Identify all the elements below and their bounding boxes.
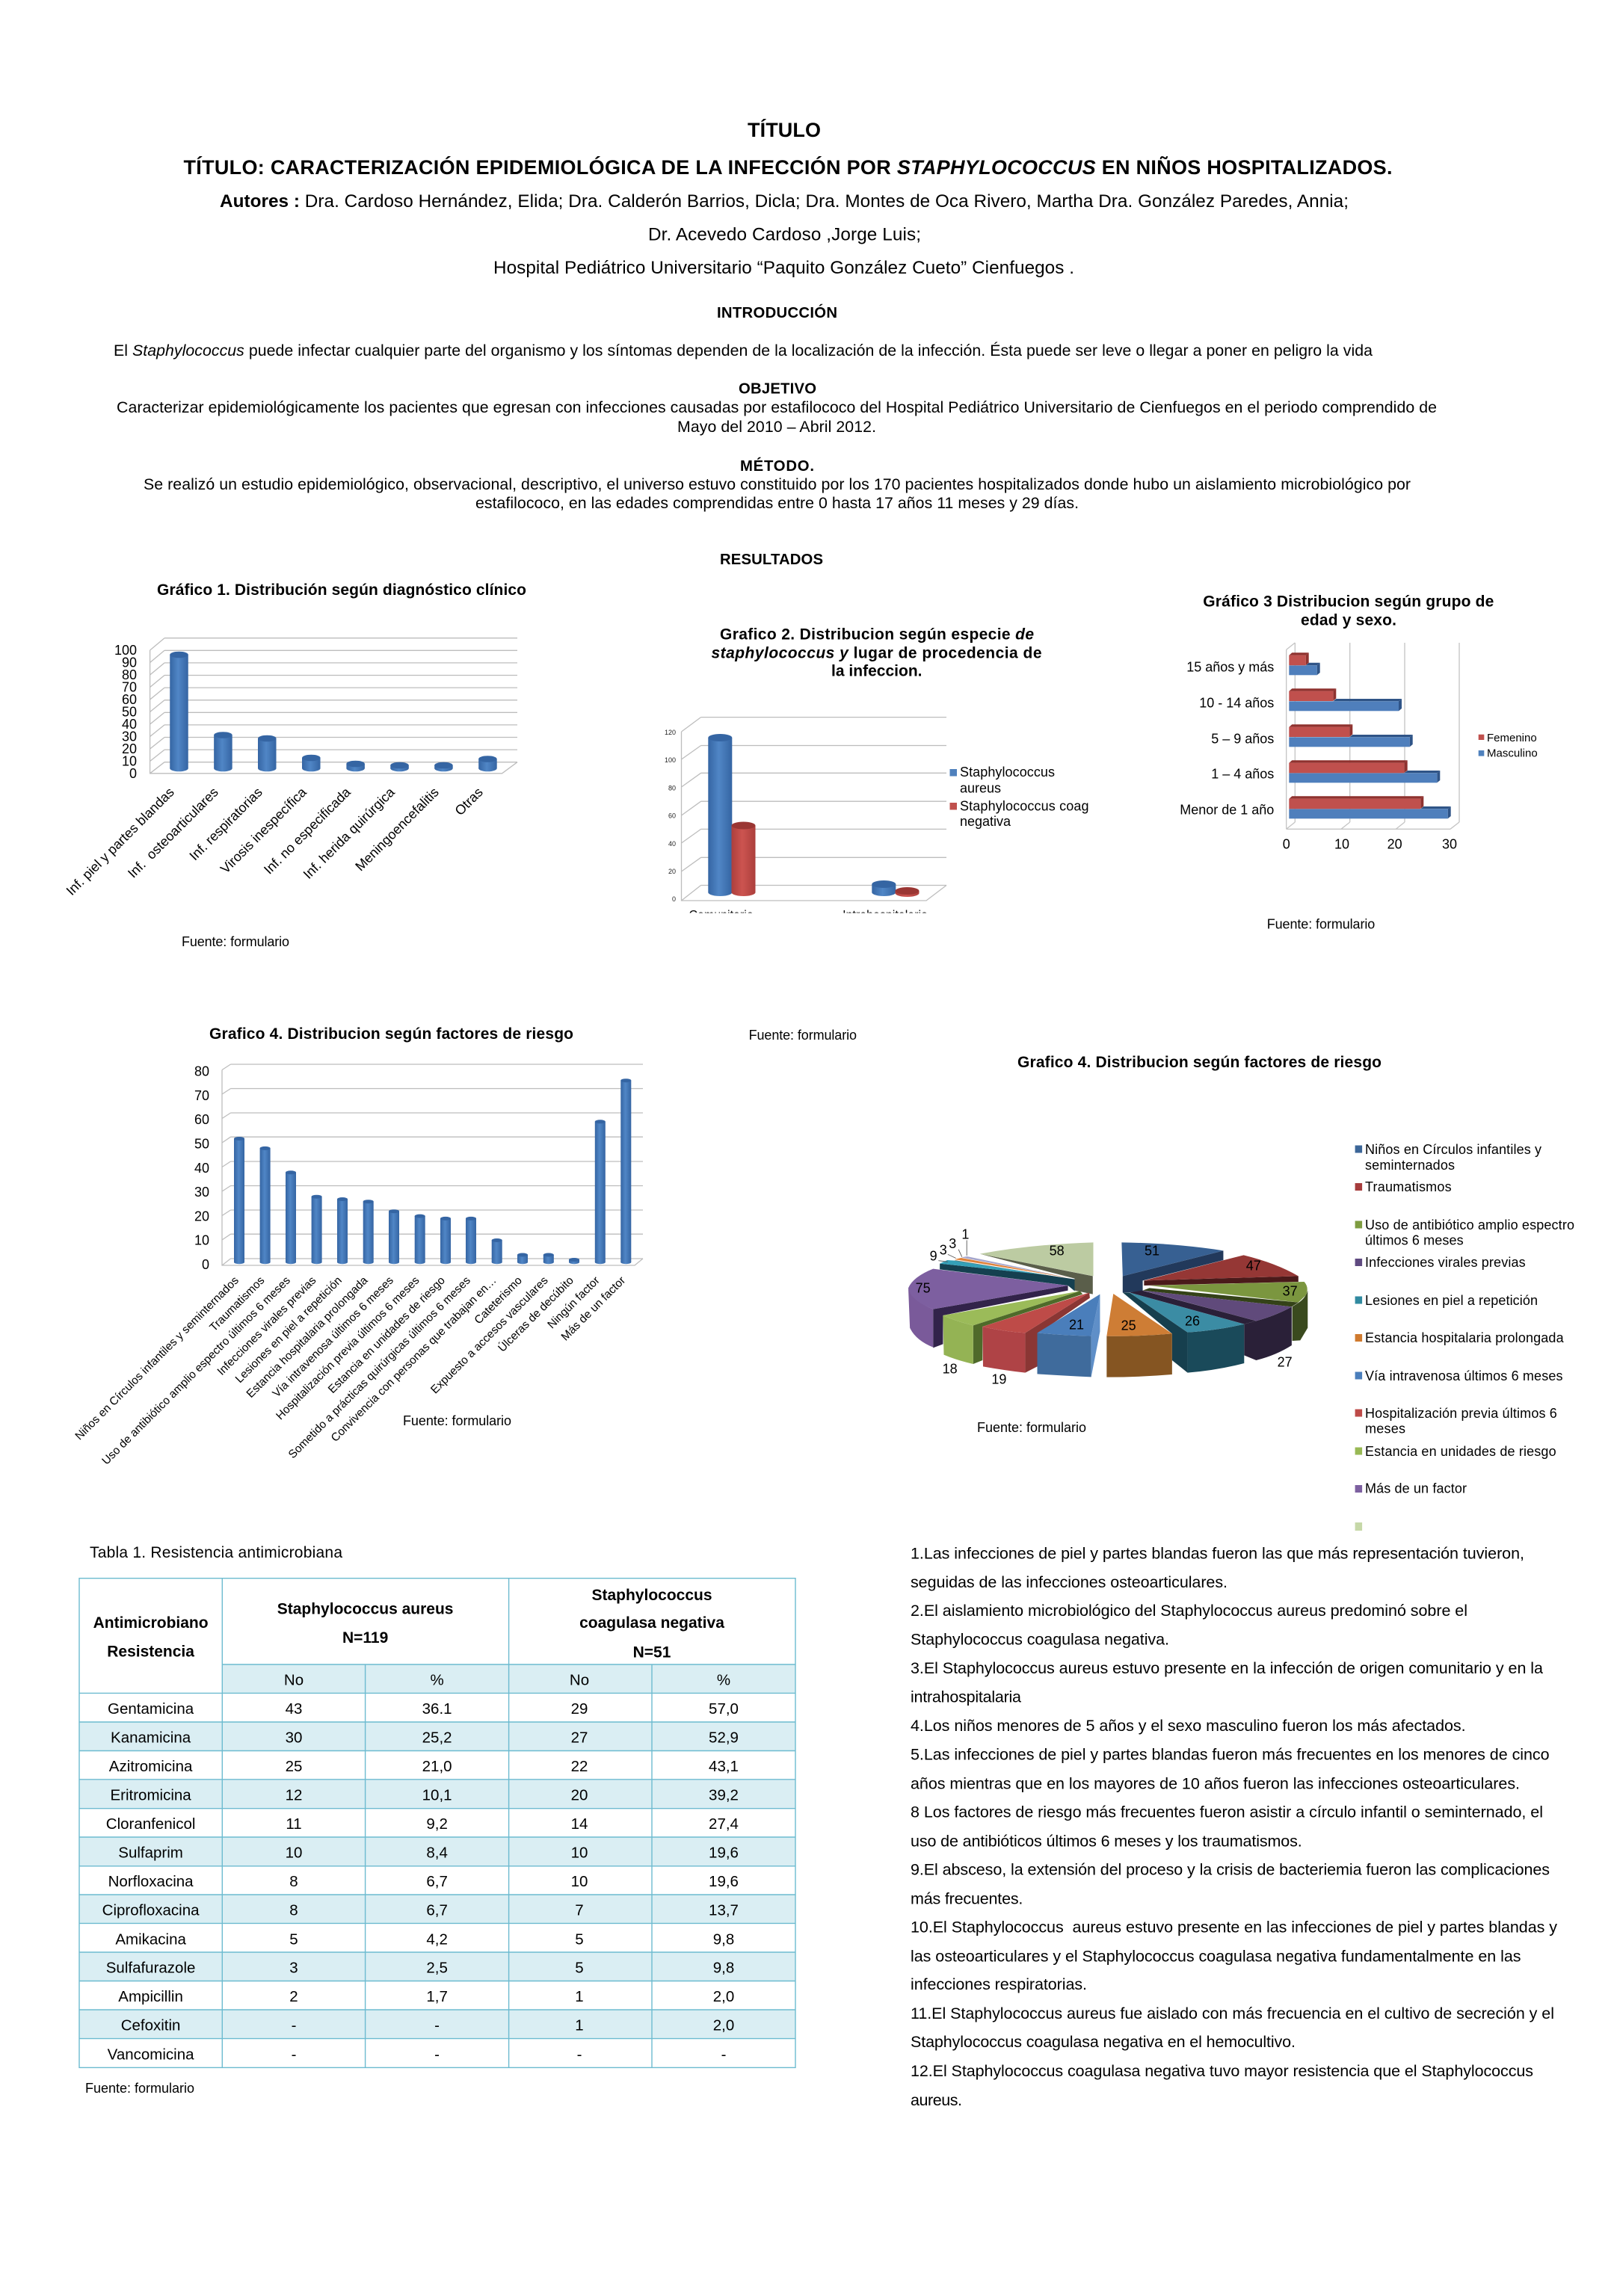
grafico 2 title: la infeccion. <box>831 662 922 680</box>
conclusions text block: aureus. <box>911 2091 962 2109</box>
table data rows: 8,4 <box>426 1845 448 1861</box>
grafico 3 category labels <box>1180 659 1274 817</box>
table header: Staphylococcus <box>591 1587 712 1604</box>
table data rows: Azitromicina <box>109 1758 193 1775</box>
conclusions text block: 2.El aislamiento microbiológico del Staphylococcus aureus predominó sobre el <box>911 1602 1467 1620</box>
conclusions text block: las osteoarticulares y el Staphylococcus coagulasa negativa fundamentalmente en las <box>911 1948 1521 1966</box>
grafico 1 y axis <box>114 643 137 781</box>
table data rows <box>102 1700 739 2063</box>
table sub header: No <box>570 1671 589 1689</box>
pie legend: Hospitalización previa últimos 6 <box>1365 1406 1557 1421</box>
grafico 4 y axis: 80 <box>194 1064 209 1079</box>
grafico 2 y axis: 120 <box>665 729 676 736</box>
grafico 4 y axis: 50 <box>194 1136 209 1151</box>
grafico 3 title <box>1203 593 1494 629</box>
objetivo: Caracterizar epidemiológicamente los pacientes que egresan con infecciones causadas por estafilococo del Hospital Pediátrico Universitario de Cienfuegos en el periodo comprendido de <box>117 398 1437 416</box>
table data rows: Ampicillin <box>118 1988 183 2005</box>
table data rows: 22 <box>571 1758 588 1775</box>
table data rows: 2,0 <box>713 2016 734 2034</box>
table data rows: 10 <box>571 1845 588 1861</box>
grafico 2 clipped category labels: Intrahospitalario <box>843 909 928 922</box>
table data rows: 7 <box>575 1901 584 1919</box>
table: resistencia antimicrobiana <box>79 1578 795 2067</box>
pie value labels: 75 <box>916 1280 931 1295</box>
pie value labels: 37 <box>1283 1283 1298 1298</box>
grafico 2 legend: Staphylococcus <box>960 765 1055 780</box>
table data rows: - <box>292 2016 296 2034</box>
conclusions text block <box>911 1545 1557 2109</box>
table grid <box>79 1578 795 2067</box>
grafico 2 plot frame <box>682 718 946 901</box>
table data rows: 14 <box>571 1815 588 1833</box>
grafico 2 y axis: 80 <box>668 785 676 792</box>
grafico 2 y axis: 40 <box>668 840 676 848</box>
table data rows: Gentamicina <box>108 1700 194 1718</box>
table source: Fuente: formulario <box>85 2081 194 2096</box>
grafico 2 legend: aureus <box>960 780 1001 795</box>
conclusions text block: 1.Las infecciones de piel y partes blandas fueron las que más representación tuvieron, <box>911 1545 1524 1563</box>
pie value labels: 3 <box>940 1242 947 1257</box>
grafico 2 legend <box>949 765 1088 829</box>
panel: grafico 3 <box>1180 593 1538 931</box>
table data rows: Ciprofloxacina <box>102 1901 200 1919</box>
table header: N=51 <box>633 1644 671 1661</box>
pie value labels: 25 <box>1121 1318 1136 1333</box>
grafico 4 category labels: Convivencia con personas que trabajan en… <box>329 1274 499 1445</box>
pie legend: Lesiones en piel a repetición <box>1365 1293 1538 1308</box>
grafico 3 category labels: 1 – 4 años <box>1211 766 1274 781</box>
grafico 3 category labels: Menor de 1 año <box>1180 802 1274 817</box>
conclusions text block: 12.El Staphylococcus coagulasa negativa tuvo mayor resistencia que el Staphylococcus <box>911 2062 1533 2080</box>
conclusions text block: seguidas de las infecciones osteoarticulares. <box>911 1573 1228 1591</box>
table data rows: 13,7 <box>709 1901 739 1919</box>
grafico 1 source: Fuente: formulario <box>182 934 289 949</box>
metodo: estafilococo, en las edades comprendidas entre 0 hasta 17 años 11 meses y 29 días. <box>475 494 1079 512</box>
pie legend: Estancia en unidades de riesgo <box>1365 1444 1556 1459</box>
conclusions text block: 5.Las infecciones de piel y partes blandas fueron más frecuentes en los menores de cinco <box>911 1746 1550 1764</box>
table data rows: 43 <box>286 1700 302 1718</box>
table data rows: Amikacina <box>115 1931 186 1948</box>
conclusions text block: intrahospitalaria <box>911 1688 1021 1706</box>
table data rows: 8 <box>289 1873 298 1890</box>
panel: grafico 4 bar chart <box>73 1025 643 1467</box>
table data rows: - <box>292 2046 296 2063</box>
table data rows: 4,2 <box>426 1931 448 1948</box>
table data rows: - <box>434 2016 440 2034</box>
conclusions text block: años mientras que en los mayores de 10 años fueron las infecciones osteoarticulares. <box>911 1774 1520 1792</box>
pie value labels: 58 <box>1050 1243 1065 1258</box>
table data rows: 2,0 <box>713 1988 734 2005</box>
table header: coagulasa negativa <box>579 1614 724 1632</box>
grafico 3 title: Gráfico 3 Distribucion según grupo de <box>1203 593 1494 611</box>
grafico 1 plot frame <box>150 638 517 774</box>
grafico 3 category labels: 5 – 9 años <box>1211 731 1274 746</box>
table data rows: 57,0 <box>709 1700 739 1718</box>
grafico 4 y axis: 30 <box>194 1185 209 1200</box>
grafico 2 legend: Staphylococcus coag <box>960 798 1088 813</box>
pie value labels: 9 <box>930 1249 937 1264</box>
table data rows: 27 <box>571 1729 588 1746</box>
grafico 1 bars <box>170 652 497 771</box>
grafico 4 y axis: 20 <box>194 1209 209 1224</box>
metodo: Se realizó un estudio epidemiológico, observacional, descriptivo, el universo estuvo constituido por los 170 pacientes hospitalizados donde hubo un aislamiento microbiológico por <box>144 475 1411 493</box>
grafico 3 category labels: 10 - 14 años <box>1199 695 1274 710</box>
conclusions text block: 8 Los factores de riesgo más frecuentes fueron asistir a círculo infantil o seminternado, el <box>911 1803 1543 1821</box>
table data rows: 25,2 <box>422 1729 452 1746</box>
objetivo <box>117 381 1437 436</box>
table data rows: 20 <box>571 1786 588 1804</box>
grafico 4 bar source: Fuente: formulario <box>403 1413 511 1428</box>
grafico 4 category labels: Lesiones en piel a repetición <box>233 1274 345 1386</box>
table sub header: % <box>430 1671 444 1689</box>
pie legend: últimos 6 meses <box>1365 1233 1464 1248</box>
grafico 2 title <box>712 626 1042 680</box>
metodo: MÉTODO. <box>740 457 814 475</box>
title block <box>184 118 1392 179</box>
table data rows: 12 <box>286 1786 302 1804</box>
table header: Antimicrobiano <box>93 1614 209 1632</box>
grafico 4 category labels: Hospitalización previa últimos 6 meses <box>274 1274 422 1422</box>
grafico 1 y axis: 60 <box>122 692 137 707</box>
conclusions text block: 10.El Staphylococcus aureus estuvo presente en las infecciones de piel y partes blandas y <box>911 1919 1557 1937</box>
table data rows: 8 <box>289 1901 298 1919</box>
grafico 3 x axis <box>1283 836 1457 851</box>
pie legend: Uso de antibiótico amplio espectro <box>1365 1218 1574 1232</box>
pie value labels: 27 <box>1278 1355 1293 1370</box>
conclusions text block: Staphylococcus coagulasa negativa. <box>911 1631 1169 1649</box>
conclusions text block: más frecuentes. <box>911 1889 1023 1907</box>
table data rows: 1,7 <box>426 1988 448 2005</box>
grafico 4 category labels: Infecciones virales previas <box>215 1274 319 1378</box>
table data rows: 27,4 <box>709 1815 739 1833</box>
pie value labels: 26 <box>1185 1313 1200 1328</box>
grafico 4 y axis: 10 <box>194 1233 209 1248</box>
grafico 2 title: staphylococcus y lugar de procedencia de <box>712 644 1042 662</box>
panel: grafico 2 <box>665 626 1088 1043</box>
table data rows: 5 <box>575 1960 584 1976</box>
grafico 1 category labels <box>64 784 486 898</box>
introduccion: INTRODUCCIÓN <box>717 303 837 321</box>
table data rows: 2 <box>289 1988 298 2005</box>
pie value labels: 3 <box>949 1236 956 1251</box>
conclusions text block: infecciones respiratorias. <box>911 1975 1087 1993</box>
metodo <box>144 457 1411 512</box>
table data rows: 3 <box>289 1960 298 1976</box>
title block: TÍTULO: CARACTERIZACIÓN EPIDEMIOLÓGICA DE LA INFECCIÓN POR STAPHYLOCOCCUS EN NIÑOS HOSPITALIZADOS. <box>184 155 1392 179</box>
grafico 4 category labels: Niños en Círculos infantiles y seminternados <box>73 1274 241 1442</box>
conclusions text block: uso de antibióticos últimos 6 meses y los traumatismos. <box>911 1832 1302 1850</box>
table data rows: Cloranfenicol <box>106 1815 195 1833</box>
pie value labels: 1 <box>961 1227 969 1242</box>
authors: Dr. Acevedo Cardoso ,Jorge Luis; <box>648 224 921 245</box>
table caption: Tabla 1. Resistencia antimicrobiana <box>90 1544 342 1561</box>
grafico 1 y axis: 100 <box>114 643 137 658</box>
objetivo: OBJETIVO <box>739 381 816 398</box>
grafico 3 category labels: 15 años y más <box>1186 659 1274 674</box>
table data rows: 10 <box>286 1845 302 1861</box>
table data rows: 1 <box>575 1988 584 2005</box>
table data rows: 30 <box>286 1729 302 1746</box>
grafico 4 category labels: Ningún factor <box>545 1274 603 1331</box>
table data rows: Kanamicina <box>111 1729 191 1746</box>
pie value labels: 18 <box>943 1362 958 1377</box>
table data rows: Sulfafurazole <box>106 1960 195 1976</box>
table data rows: 9,8 <box>713 1931 734 1948</box>
conclusions text block: 4.Los niños menores de 5 años y el sexo masculino fueron los más afectados. <box>911 1717 1466 1735</box>
grafico 3 bars <box>1289 652 1451 818</box>
table data rows: 25 <box>286 1758 302 1775</box>
grafico 1 category labels: Meningoencefalitis <box>352 785 442 874</box>
grafico 4 category labels <box>73 1274 628 1467</box>
pie value labels: 51 <box>1145 1243 1159 1258</box>
table header: Staphylococcus aureus <box>277 1601 453 1617</box>
table data rows: 43,1 <box>709 1758 739 1775</box>
authors: Autores : Dra. Cardoso Hernández, Elida; Dra. Calderón Barrios, Dicla; Dra. Montes de Oca Rivero, Martha Dra. González Paredes, Annia; <box>220 191 1349 212</box>
grafico 4 category labels: Vía intravenosa últimos 6 meses <box>270 1274 396 1400</box>
exploded 3d pie <box>908 1240 1307 1377</box>
grafico 1 category labels: Otras <box>452 785 486 818</box>
introduccion: El Staphylococcus puede infectar cualquier parte del organismo y los síntomas dependen de la localización de la infección. Ésta puede ser leve o llegar a poner en peligro la vida <box>114 341 1373 359</box>
grafico 4 category labels: Sometido a prácticas quirúrgicas últimos 6 meses <box>286 1274 473 1461</box>
grafico 2 y axis: 60 <box>668 812 676 819</box>
grafico 1 y axis: 80 <box>122 667 137 682</box>
grafico 4 category labels: Cateterismo <box>472 1274 525 1327</box>
pie legend: Traumatismos <box>1365 1179 1452 1194</box>
table data rows: 10,1 <box>422 1786 452 1804</box>
grafico 4 category labels: Expuesto a accesos vasculares <box>428 1274 551 1396</box>
pie legend: meses <box>1365 1422 1405 1436</box>
table data rows: 6,7 <box>426 1873 448 1890</box>
grafico 4 y axis: 0 <box>202 1257 209 1272</box>
panel: grafico 1 <box>64 581 526 949</box>
table data rows: 5 <box>575 1931 584 1948</box>
table data rows: Cefoxitin <box>121 2016 180 2034</box>
grafico 4 category labels: Más de un factor <box>559 1274 628 1343</box>
table data rows: 52,9 <box>709 1729 739 1746</box>
grafico 1 title: Gráfico 1. Distribución según diagnóstico clínico <box>157 581 526 599</box>
resultados heading: RESULTADOS <box>720 552 823 568</box>
grafico 1 y axis: 10 <box>122 753 137 768</box>
grafico 1 category labels: Inf. piel y partes blandas <box>64 785 177 898</box>
table sub header: % <box>717 1671 730 1689</box>
grafico 4 plot frame <box>222 1064 643 1265</box>
table data rows: 2,5 <box>426 1960 448 1976</box>
table data rows: 9,8 <box>713 1960 734 1976</box>
pie legend: Más de un factor <box>1365 1481 1467 1496</box>
grafico 3 legend: Femenino <box>1487 732 1537 744</box>
table data rows: 10 <box>571 1873 588 1890</box>
grafico 3 title: edad y sexo. <box>1301 612 1396 629</box>
table sub header: No <box>284 1671 304 1689</box>
table data rows: Eritromicina <box>110 1786 191 1804</box>
pie legend <box>1355 1142 1574 1531</box>
authors: Hospital Pediátrico Universitario “Paquito González Cueto” Cienfuegos . <box>493 258 1074 278</box>
grafico 1 category labels: Virosis inespecífica <box>218 784 310 877</box>
table data rows: 5 <box>289 1931 298 1948</box>
pie legend: Vía intravenosa últimos 6 meses <box>1365 1368 1562 1383</box>
grafico 4 y axis: 70 <box>194 1088 209 1103</box>
grafico 3 x axis: 30 <box>1442 836 1457 851</box>
table data rows: 1 <box>575 2016 584 2034</box>
grafico 1 category labels: Inf. herida quirúrgica <box>301 784 398 882</box>
grafico 3 x axis: 20 <box>1387 836 1402 851</box>
grafico 3 x axis: 10 <box>1334 836 1349 851</box>
table header <box>93 1587 724 1661</box>
table data rows: 11 <box>286 1815 302 1833</box>
table data rows: Norfloxacina <box>108 1873 194 1890</box>
table data rows: - <box>577 2046 582 2063</box>
grafico 1 y axis: 50 <box>122 704 137 719</box>
table data rows: 39,2 <box>709 1786 739 1804</box>
grafico 2 title: Grafico 2. Distribucion según especie de <box>720 626 1034 643</box>
title block: TÍTULO <box>748 118 821 141</box>
grafico 1 y axis: 30 <box>122 729 137 744</box>
grafico 2 clipped category labels <box>689 910 927 913</box>
grafico 1 y axis: 0 <box>129 766 137 781</box>
grafico 1 category labels: Inf. respiratorias <box>186 785 265 863</box>
conclusions text block: 11.El Staphylococcus aureus fue aislado con más frecuencia en el cultivo de secreción y el <box>911 2005 1554 2022</box>
table data rows: - <box>434 2046 440 2063</box>
table sub header <box>284 1671 730 1689</box>
grafico 4 bars <box>234 1078 631 1264</box>
table data rows: 21,0 <box>422 1758 452 1775</box>
objetivo: Mayo del 2010 – Abril 2012. <box>677 418 876 436</box>
table data rows: 19,6 <box>709 1845 739 1861</box>
table data rows: 6,7 <box>426 1901 448 1919</box>
grafico 1 y axis: 90 <box>122 655 137 670</box>
table data rows: - <box>721 2046 726 2063</box>
table data rows: Sulfaprim <box>118 1845 183 1861</box>
grafico 2 y axis <box>665 729 676 903</box>
conclusions text block: Staphylococcus coagulasa negativa en el hemocultivo. <box>911 2033 1296 2051</box>
pie value labels: 21 <box>1069 1317 1084 1332</box>
grafico 2 y axis: 0 <box>672 895 676 903</box>
grafico 1 category labels: Inf. no especificada <box>261 784 354 877</box>
pie value labels <box>916 1227 1298 1387</box>
grafico 1 category labels: Inf. osteoarticulares <box>125 785 221 880</box>
grafico 2 clipped category labels: Comunitario <box>689 909 754 922</box>
grafico 3 legend <box>1479 732 1538 760</box>
table data rows: 36.1 <box>422 1700 452 1718</box>
grafico 4 y axis <box>194 1064 209 1272</box>
grafico 3 source: Fuente: formulario <box>1267 916 1375 931</box>
grafico 2 legend: negativa <box>960 814 1011 829</box>
grafico 4 y axis: 60 <box>194 1112 209 1127</box>
pie legend: Infecciones virales previas <box>1365 1255 1526 1270</box>
grafico 4 category labels: Úlceras de decúbito <box>496 1274 576 1354</box>
grafico 4 category labels: Estancia en unidades de riesgo <box>326 1274 448 1396</box>
grafico 1 y axis: 70 <box>122 680 137 695</box>
introduccion <box>114 303 1373 359</box>
grafico 2 bars <box>708 734 920 897</box>
grafico 3 legend: Masculino <box>1487 747 1538 760</box>
grafico 4 category labels: Traumatismos <box>207 1274 268 1334</box>
authors <box>220 191 1349 278</box>
table data rows: 9,2 <box>426 1815 448 1833</box>
pie value labels: 47 <box>1246 1258 1261 1273</box>
pie legend: Estancia hospitalaria prolongada <box>1365 1330 1565 1345</box>
grafico 2 y axis: 100 <box>665 756 676 764</box>
grafico 4 bar title: Grafico 4. Distribucion según factores de riesgo <box>209 1025 573 1043</box>
grafico 4 category labels: Uso de antibiótico amplio espectro últimos 6 meses <box>99 1274 293 1467</box>
table shaded rows <box>79 1664 795 2039</box>
grafico 3 x axis: 0 <box>1283 836 1290 851</box>
pie value labels: 19 <box>991 1372 1006 1387</box>
pie source: Fuente: formulario <box>977 1420 1086 1435</box>
table header: Resistencia <box>107 1644 194 1661</box>
grafico 1 y axis: 20 <box>122 741 137 756</box>
grafico 4 y axis: 40 <box>194 1161 209 1176</box>
table data rows: 29 <box>571 1700 588 1718</box>
conclusions text block: 9.El absceso, la extensión del proceso y la crisis de bacteriemia fueron las complicaciones <box>911 1861 1550 1879</box>
pie legend: Niños en Círculos infantiles y <box>1365 1142 1541 1157</box>
grafico 2 y axis: 20 <box>668 868 676 875</box>
grafico 3 plot frame <box>1287 643 1459 829</box>
grafico 2 source: Fuente: formulario <box>749 1028 857 1043</box>
grafico 4 category labels: Estancia hospitalaria prolongada <box>244 1274 371 1401</box>
conclusions text block: 3.El Staphylococcus aureus estuvo presente en la infección de origen comunitario y en la <box>911 1659 1543 1677</box>
table data rows: 19,6 <box>709 1873 739 1890</box>
pie title: Grafico 4. Distribucion según factores de riesgo <box>1017 1054 1382 1071</box>
panel: grafico 4 pie chart <box>908 1054 1574 1531</box>
table data rows: Vancomicina <box>108 2046 194 2063</box>
pie legend: seminternados <box>1365 1158 1455 1173</box>
table header: N=119 <box>342 1629 388 1647</box>
grafico 1 y axis: 40 <box>122 717 137 732</box>
